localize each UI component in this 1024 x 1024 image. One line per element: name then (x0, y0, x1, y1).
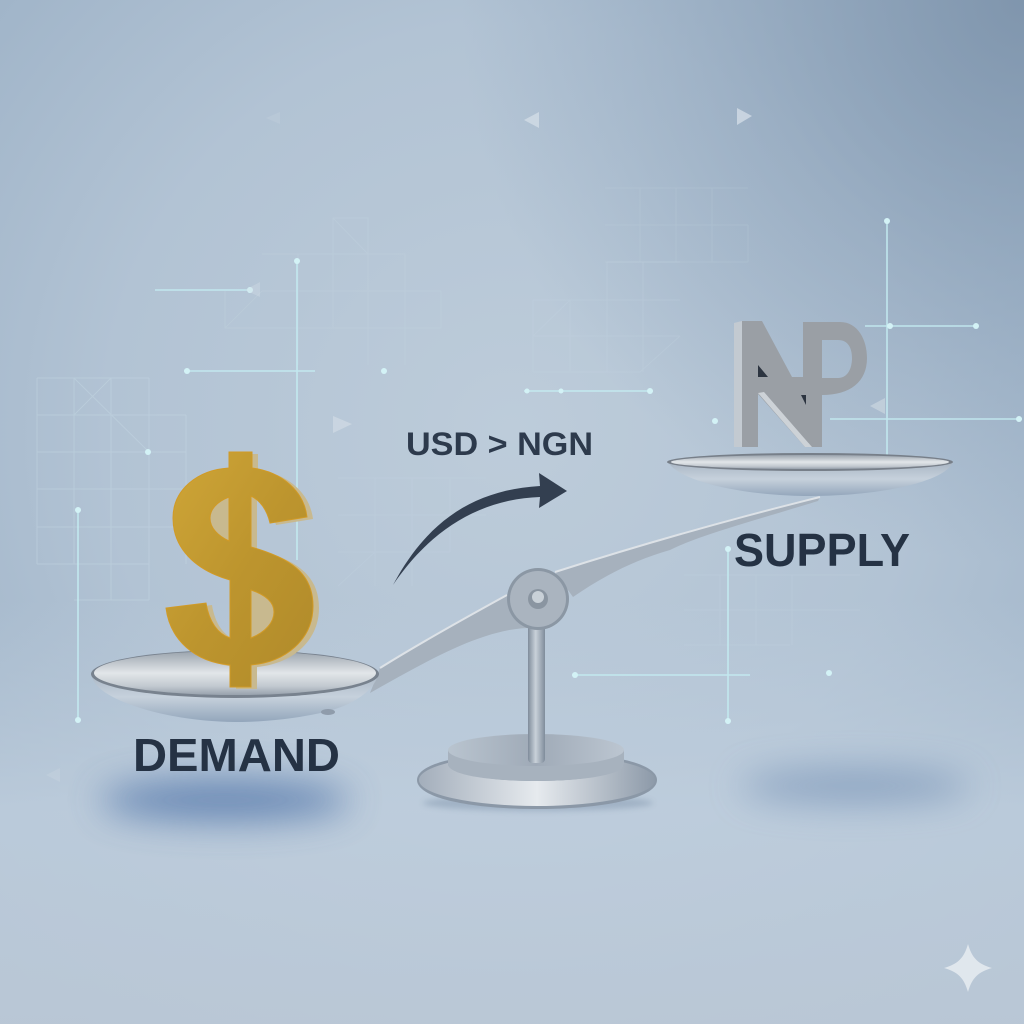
background grid pattern: left (37, 378, 186, 600)
stand column (528, 625, 545, 763)
curved arrow (393, 473, 567, 585)
scale beam (370, 497, 820, 693)
icon: naira symbol (734, 321, 867, 447)
small triangle markers (46, 108, 885, 782)
icon: gold dollar sign (166, 452, 319, 689)
background grid pattern: upper right (605, 188, 748, 262)
background grid pattern: upper centre-left (225, 218, 441, 365)
floor shadows (100, 770, 970, 820)
label: USD > NGN: USD > NGN (406, 426, 593, 462)
right pan (667, 453, 953, 496)
label: SUPPLY: SUPPLY (734, 524, 910, 576)
glowing nodes (75, 218, 1022, 724)
stand base (417, 734, 657, 809)
icon: sparkle watermark (944, 944, 992, 992)
scale stand (417, 625, 657, 809)
background grid pattern: centre (533, 262, 680, 372)
label: DEMAND: DEMAND (133, 729, 340, 781)
left pan (91, 650, 379, 722)
background grid pattern: lower centre and right (338, 478, 860, 645)
glowing circuit lines (78, 220, 1022, 724)
